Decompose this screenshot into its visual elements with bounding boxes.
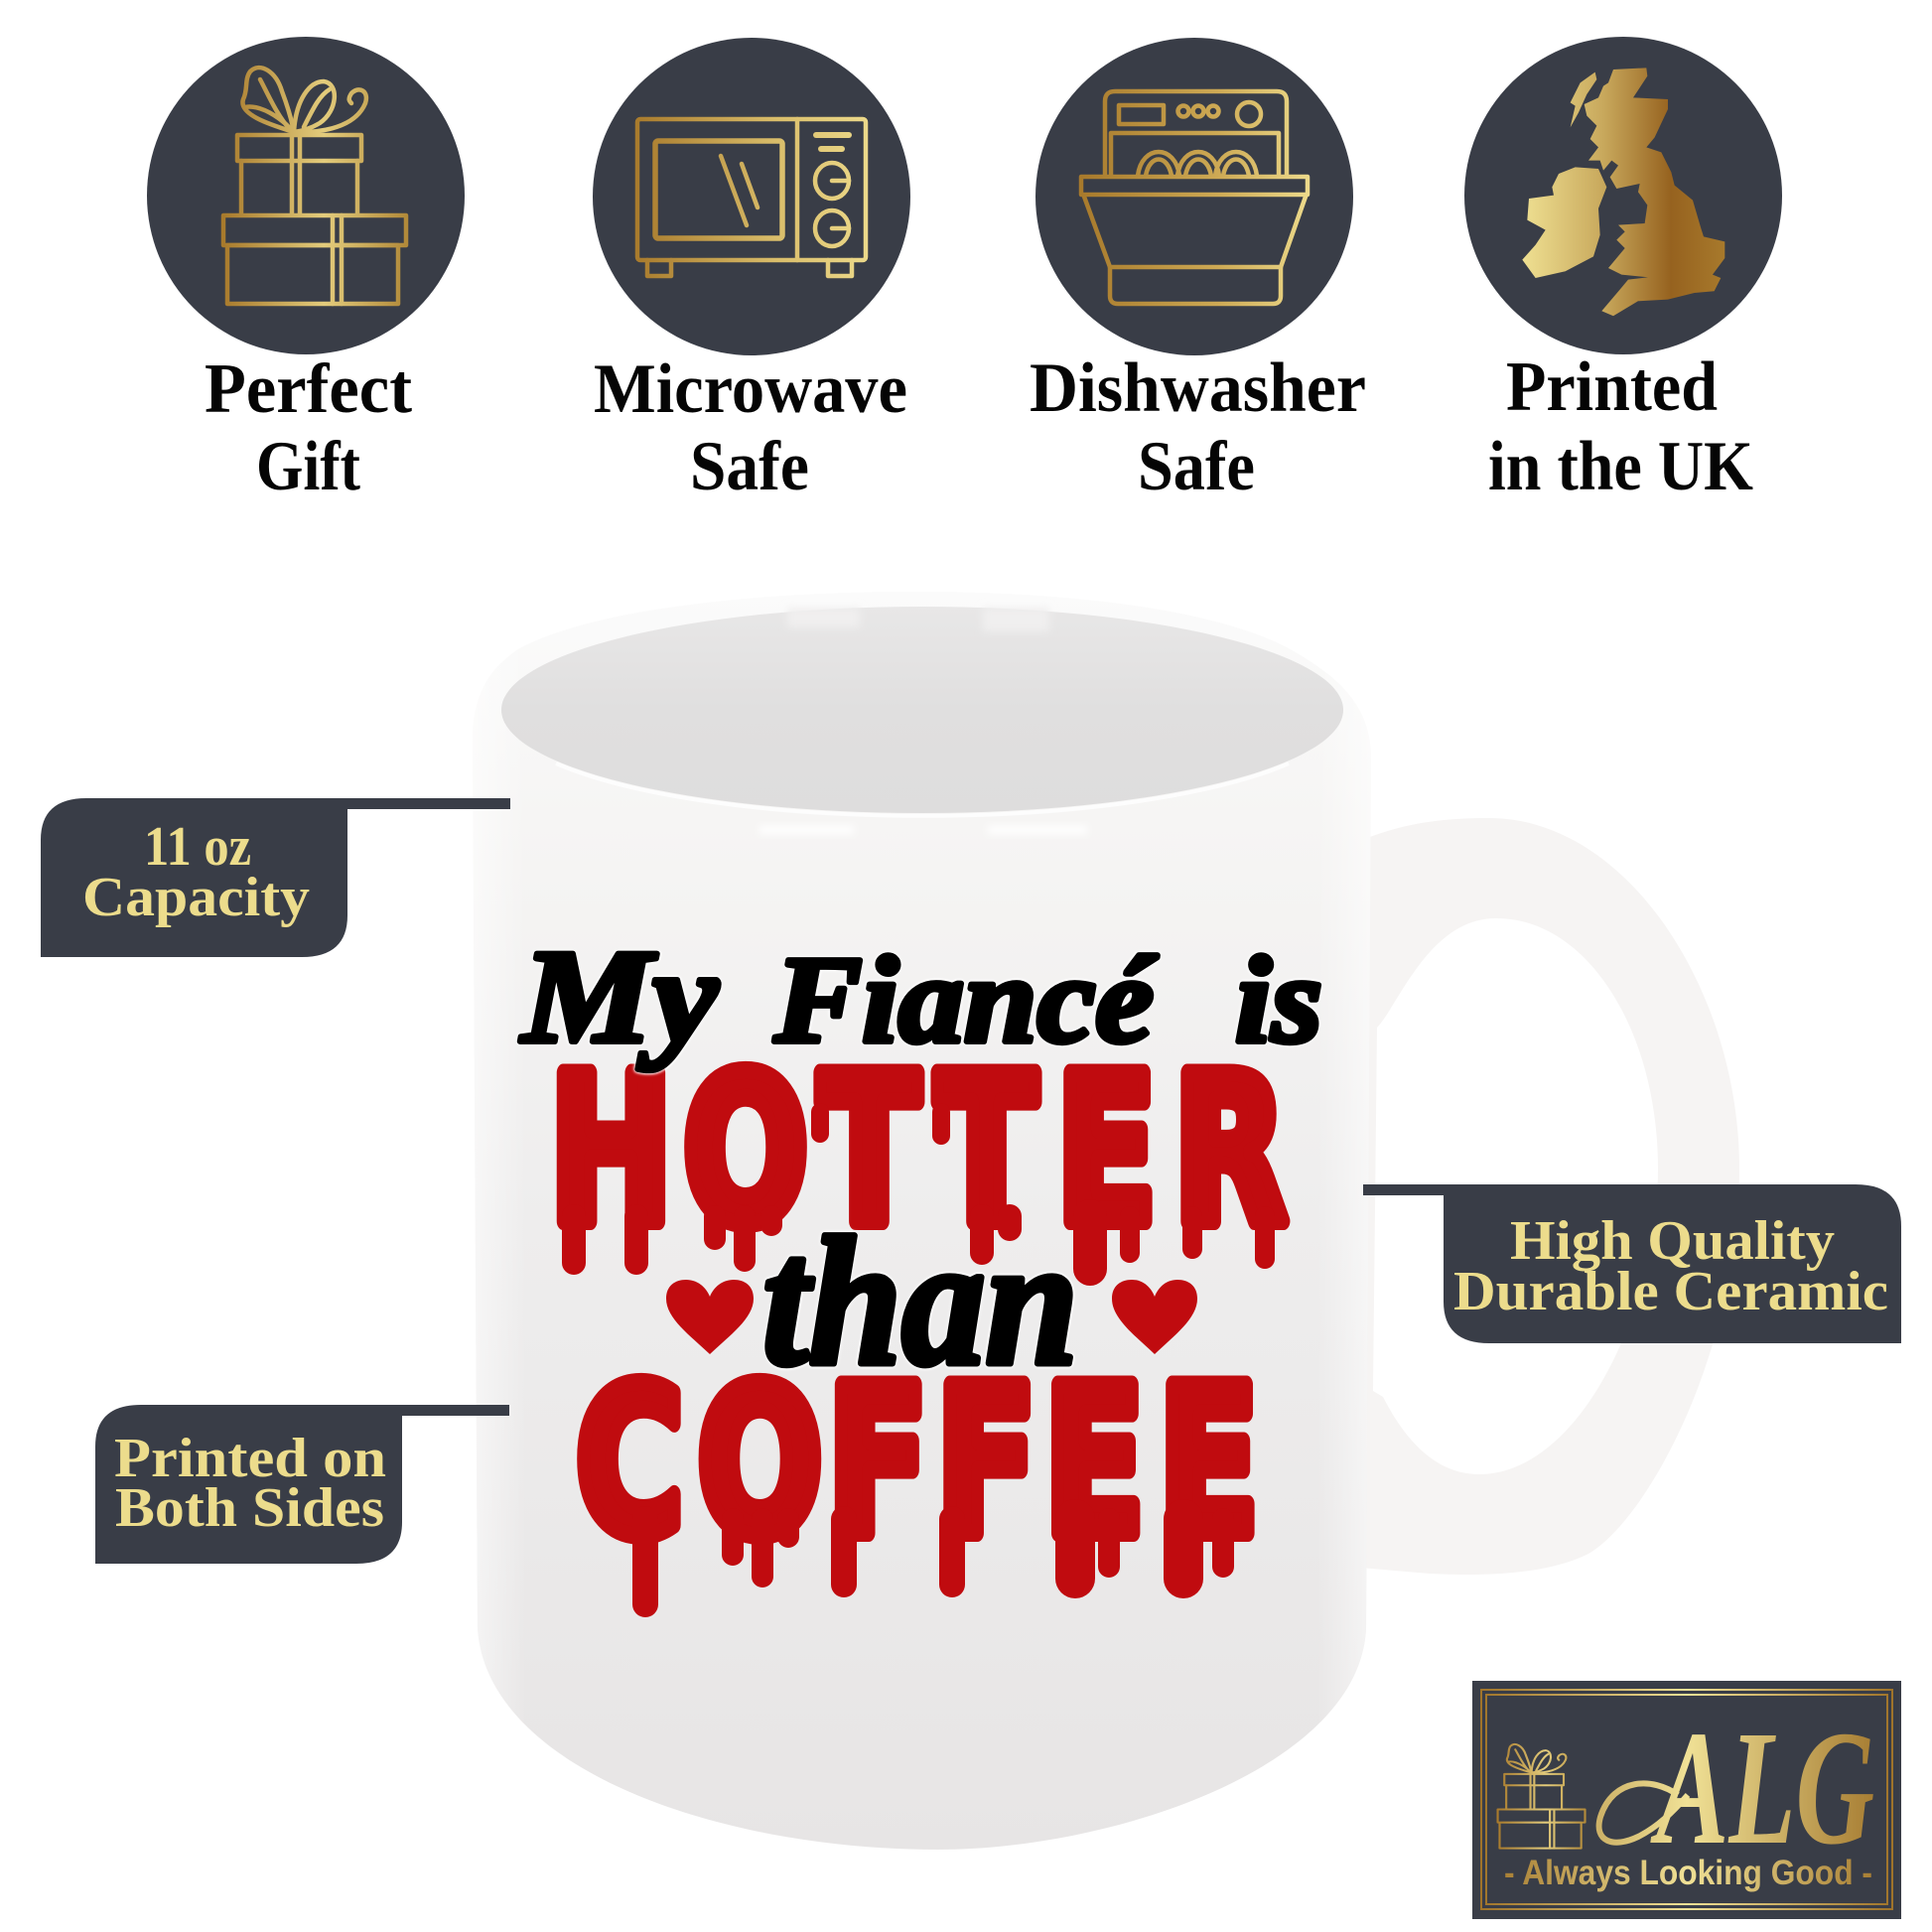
icon: microwave: [637, 119, 866, 276]
mug interior: [501, 607, 1343, 813]
script: My: My: [520, 923, 719, 1071]
monogram swoosh: [1599, 1783, 1688, 1843]
callout text: 11 oz: [144, 816, 251, 878]
icon: dishwasher: [1081, 91, 1308, 304]
circle badge: [1035, 38, 1353, 355]
mug handle: [1360, 818, 1739, 1575]
circle badge: [593, 38, 910, 355]
callout tab with leader line: [1363, 1184, 1901, 1343]
heading: Perfect Gift: Gift: [256, 428, 360, 505]
panel: microwave safe: [593, 38, 910, 355]
callout text: Durable Ceramic: [1453, 1261, 1888, 1322]
callout text: [114, 1428, 386, 1539]
body edge highlight: [473, 592, 1371, 1850]
callout text: High Quality: [1510, 1210, 1835, 1272]
callout text: Printed on: [114, 1428, 386, 1489]
callout tab with leader line: [95, 1405, 509, 1564]
circle badge: [147, 37, 465, 354]
rim highlight: [556, 763, 1289, 816]
heart right: [1112, 1280, 1197, 1354]
circle badge: [1464, 37, 1782, 354]
inner reflection left: [787, 608, 860, 627]
heading: Microwave Safe: Microwave: [594, 350, 907, 428]
heading: Dishwasher Safe: Dishwasher: [1030, 349, 1366, 427]
mug print design: [520, 923, 1322, 1604]
outer reflection right: [988, 826, 1087, 834]
panel: dishwasher safe: [1035, 38, 1353, 355]
heading: Perfect Gift: [205, 350, 412, 505]
logo: Always Looking Good: [1472, 1681, 1901, 1919]
outer gold frame: [1481, 1690, 1892, 1909]
callout text: [1453, 1210, 1888, 1322]
heading: Printed in the UK: in the UK: [1488, 428, 1753, 505]
heading: Microwave Safe: Safe: [690, 428, 809, 505]
callout text: [82, 816, 310, 928]
heading: Perfect Gift: Perfect: [205, 350, 412, 428]
callout tab with leader line: [41, 798, 510, 957]
callout: high quality durable ceramic: [1363, 1184, 1901, 1343]
heading: Printed in the UK: [1488, 348, 1753, 505]
white ceramic mug: [473, 592, 1739, 1850]
callout: 11 oz capacity: [41, 798, 510, 957]
word: HOTTER: HOTTER: [550, 1034, 1287, 1270]
callout text: Both Sides: [115, 1477, 384, 1539]
panel: perfect gift: [147, 37, 465, 354]
callout: printed on both sides: [95, 1405, 509, 1564]
icon: small gifts: [1498, 1744, 1586, 1849]
script: is: is: [1235, 932, 1322, 1069]
logo panel: [1472, 1681, 1901, 1919]
heading: Dishwasher Safe: [1030, 349, 1366, 505]
inner reflection right: [983, 608, 1049, 631]
icon: stacked gifts: [223, 68, 406, 304]
script: Fiancé: Fiancé: [773, 932, 1158, 1069]
heading: Printed in the UK: Printed: [1506, 348, 1718, 426]
heading: Microwave Safe: [594, 350, 907, 505]
icon: map of UK and Ireland: [1522, 68, 1725, 316]
panel: printed in the UK: [1464, 37, 1782, 354]
heading: Dishwasher Safe: Safe: [1138, 428, 1255, 505]
heart left: [666, 1280, 754, 1354]
word: COFFEE: COFFEE: [576, 1345, 1259, 1582]
inner gold frame: [1486, 1695, 1887, 1904]
paint drips under HOTTER: [574, 1112, 1265, 1269]
script: than: than: [762, 1200, 1078, 1404]
brand tagline: - Always Looking Good -: [1504, 1854, 1872, 1892]
callout text: Capacity: [82, 867, 310, 928]
mug body: [473, 592, 1371, 1850]
outer reflection left: [759, 826, 854, 834]
paint drips under COFFEE: [645, 1519, 1223, 1604]
